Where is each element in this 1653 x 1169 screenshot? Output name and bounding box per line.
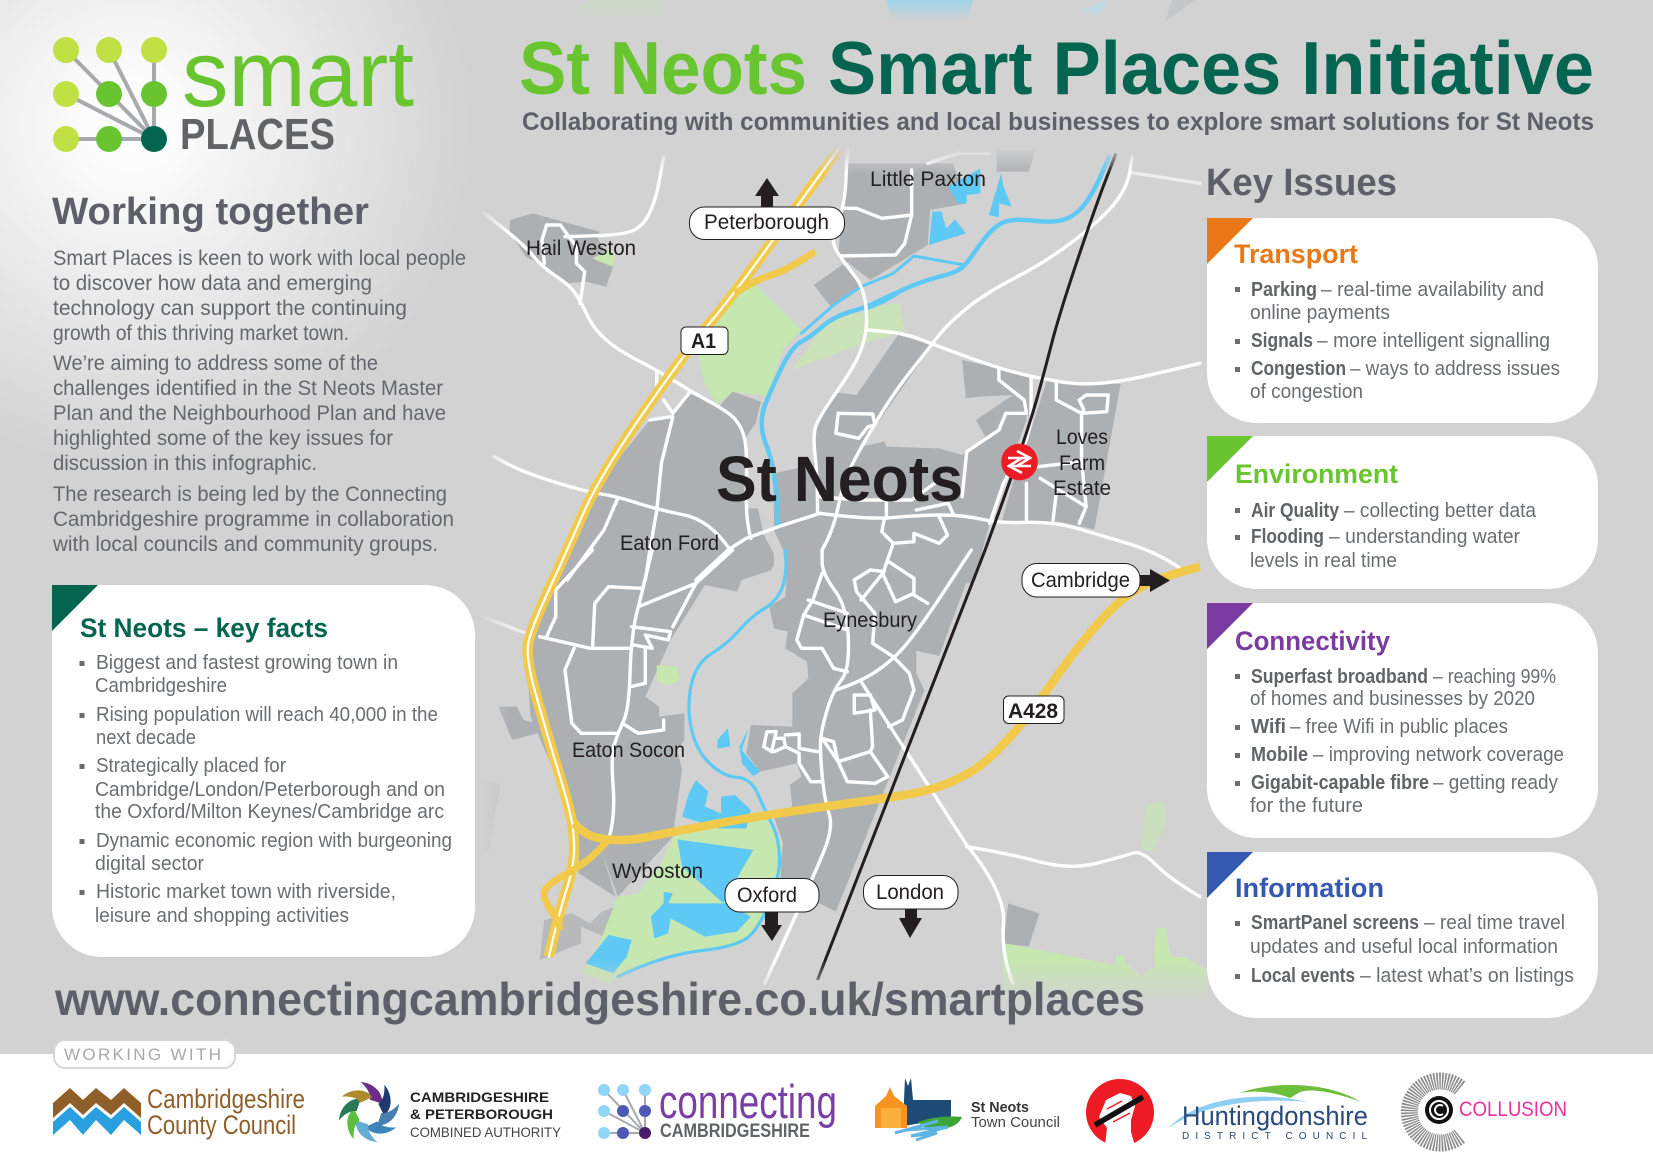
icon: railway station xyxy=(1001,444,1038,480)
transport heading: Transport xyxy=(1234,239,1358,269)
logo: Cambridgeshire and Peterborough Combined Authority xyxy=(336,1079,562,1145)
environment list: – understanding water xyxy=(1329,526,1520,548)
map labels: places: Loves xyxy=(1056,426,1108,449)
connectivity list: Gigabit-capable fibre xyxy=(1251,772,1429,794)
map: parks and green spaces xyxy=(581,250,1167,983)
map: lakes and River Great Ouse xyxy=(586,157,1109,977)
logo: Cambridgeshire County Council xyxy=(53,1084,305,1140)
connectivity list: – reaching 99% xyxy=(1433,666,1556,688)
road sign: London with arrow xyxy=(864,876,958,938)
transport list: – ways to address issues xyxy=(1350,358,1560,380)
text block: working together description: Smart Places is keen to work with local people xyxy=(53,247,466,270)
connectivity list: – free Wifi in public places xyxy=(1290,716,1508,738)
text block: working together description: challenges identified in the St Neots Master xyxy=(53,377,443,400)
key facts list: Dynamic economic region with burgeoning xyxy=(96,830,452,852)
logo: Cambridgeshire and Peterborough Combined Authority: CAMBRIDGESHIRE xyxy=(410,1089,549,1105)
text block: working together description: highlighted some of the key issues for xyxy=(53,427,393,450)
logo wordmark: smart xyxy=(182,21,414,126)
key facts list: Biggest and fastest growing town in xyxy=(96,652,398,674)
transport list: – more intelligent signalling xyxy=(1317,330,1550,352)
connectivity list: – improving network coverage xyxy=(1313,744,1564,766)
environment list: Air Quality xyxy=(1251,500,1340,522)
key facts list: Cambridge/London/Peterborough and on xyxy=(95,779,445,801)
text block: working together description xyxy=(52,247,466,556)
panel: Transport xyxy=(1207,218,1598,423)
website URL: www.connectingcambridgeshire.co.uk/smartplaces xyxy=(54,973,1145,1025)
footer band xyxy=(0,1054,1653,1169)
title: St Neots xyxy=(519,26,807,110)
road sign: London with arrow: London xyxy=(876,881,944,904)
map labels: places: Eaton Socon xyxy=(572,739,685,762)
logo icon: network dots xyxy=(53,37,167,152)
logo: St Neots Town Council: St Neots xyxy=(971,1099,1029,1116)
transport list: Parking xyxy=(1251,279,1317,301)
map of St Neots xyxy=(480,143,1207,1010)
smart places logo xyxy=(53,21,414,159)
information heading: Information xyxy=(1235,873,1384,903)
key facts list: the Oxford/Milton Keynes/Cambridge arc xyxy=(95,801,444,823)
logo: Connecting Cambridgeshire xyxy=(598,1075,837,1142)
key facts heading: St Neots – key facts xyxy=(80,613,328,643)
text block: working together description: Plan and the Neighbourhood Plan and have xyxy=(53,402,446,425)
map labels: places: Wyboston xyxy=(612,860,703,883)
connectivity list xyxy=(1235,666,1564,817)
logo: Huntingdonshire District Council: DISTRICT COUNCIL xyxy=(1182,1131,1367,1142)
logo: Collusion: COLLUSION xyxy=(1459,1098,1567,1121)
key facts list: Cambridgeshire xyxy=(95,675,227,697)
logo: St Neots Town Council xyxy=(875,1078,1060,1140)
logo: Cambridgeshire and Peterborough Combined Authority: COMBINED AUTHORITY xyxy=(410,1124,562,1140)
environment list: – collecting better data xyxy=(1344,500,1537,522)
connectivity list: – getting ready xyxy=(1433,772,1558,794)
text block: working together description: discussion in this infographic. xyxy=(53,452,317,475)
connectivity list: for the future xyxy=(1250,795,1363,817)
key facts list: Historic market town with riverside, xyxy=(96,881,396,903)
logo: Connecting Cambridgeshire: CAMBRIDGESHIRE xyxy=(660,1121,810,1142)
map: green space south-east xyxy=(1003,928,1207,1010)
map: railway line xyxy=(818,153,1116,980)
title xyxy=(519,26,1594,110)
map labels: places: Hail Weston xyxy=(526,237,636,260)
key facts list: leisure and shopping activities xyxy=(95,905,349,927)
map: A1 and A428 main roads xyxy=(528,143,1200,957)
information list: SmartPanel screens xyxy=(1251,912,1419,934)
map labels: places xyxy=(526,168,1111,883)
road sign: Cambridge with arrow xyxy=(1022,564,1170,597)
road sign: A428: A428 xyxy=(1008,700,1058,723)
transport list: – real-time availability and xyxy=(1321,279,1544,301)
logo: Connecting Cambridgeshire: connecting xyxy=(659,1075,837,1128)
map labels: places: Eynesbury xyxy=(823,609,917,632)
key facts list: Rising population will reach 40,000 in the xyxy=(96,704,438,726)
environment heading: Environment xyxy=(1235,459,1398,489)
subtitle: Collaborating with communities and local businesses to explore smart solutions for St Neots xyxy=(522,108,1594,136)
information list: – latest what’s on listings xyxy=(1360,965,1574,987)
connectivity list: Mobile xyxy=(1251,744,1308,766)
map label: town name: St Neots xyxy=(716,443,963,515)
panel: Information xyxy=(1207,852,1598,1018)
information list xyxy=(1235,912,1574,987)
transport list xyxy=(1235,279,1560,403)
heading: Key Issues: Key Issues xyxy=(1206,162,1397,204)
text block: working together description: to discover how data and emerging xyxy=(53,272,372,295)
transport list: Signals xyxy=(1251,330,1313,352)
road sign: A1: A1 xyxy=(691,330,716,353)
logo: Collusion xyxy=(1409,1081,1567,1143)
road sign: A1 xyxy=(681,327,728,354)
connectivity heading: Connectivity xyxy=(1235,626,1390,656)
map labels: places: Little Paxton xyxy=(870,168,986,191)
connectivity list: Wifi xyxy=(1251,716,1286,738)
text block: working together description: with local councils and community groups. xyxy=(52,533,438,556)
text block: working together description: growth of this thriving market town. xyxy=(53,322,349,345)
map labels: places: Eaton Ford xyxy=(620,532,719,555)
faint map remnants at top edge xyxy=(565,0,1195,22)
heading: Working together: Working together xyxy=(52,191,369,233)
logo wordmark: PLACES xyxy=(180,110,335,159)
label: Working with: WORKING WITH xyxy=(64,1045,221,1064)
map labels: places: Farm xyxy=(1059,452,1105,475)
road sign: Oxford with arrow xyxy=(725,878,819,941)
map labels: places: Estate xyxy=(1053,477,1111,500)
panel: Connectivity xyxy=(1207,603,1598,838)
transport list: online payments xyxy=(1250,302,1390,324)
key facts list: Strategically placed for xyxy=(96,755,286,777)
label: Working with xyxy=(54,1040,235,1068)
title: Smart Places Initiative xyxy=(828,26,1594,110)
road sign: A428 xyxy=(1004,696,1064,724)
information list: Local events xyxy=(1251,965,1355,987)
text block: working together description: The research is being led by the Connecting xyxy=(53,483,447,506)
environment list: levels in real time xyxy=(1250,550,1397,572)
logo: Huntingdonshire District Council xyxy=(1169,1085,1368,1142)
key facts list: next decade xyxy=(96,727,196,749)
information list: – real time travel xyxy=(1424,912,1565,934)
transport list: Congestion xyxy=(1251,358,1346,380)
text block: working together description: We’re aiming to address some of the xyxy=(53,352,378,375)
road sign: Cambridge with arrow: Cambridge xyxy=(1031,569,1130,592)
logo: Huntingdonshire District Council: Huntingdonshire xyxy=(1182,1101,1368,1131)
road sign: Peterborough with arrow xyxy=(690,178,844,240)
panel: Environment xyxy=(1207,436,1598,589)
key facts list: digital sector xyxy=(95,853,204,875)
logo: Cambridgeshire County Council: County Council xyxy=(147,1110,296,1140)
panel: St Neots key facts xyxy=(52,585,475,957)
map: built-up areas xyxy=(480,150,1121,960)
connectivity list: Superfast broadband xyxy=(1251,666,1428,688)
road sign: Oxford with arrow: Oxford xyxy=(737,884,797,907)
map: local roads xyxy=(482,150,1200,983)
text block: working together description: Cambridgeshire programme in collaboration xyxy=(53,508,454,531)
road sign: Peterborough with arrow: Peterborough xyxy=(704,211,829,234)
logo: St Neots Town Council: Town Council xyxy=(971,1114,1060,1131)
logo: Cambridgeshire and Peterborough Combined Authority: & PETERBOROUGH xyxy=(410,1106,553,1122)
connectivity list: of homes and businesses by 2020 xyxy=(1250,688,1535,710)
logo: red fist emblem xyxy=(1086,1079,1154,1146)
logo: Cambridgeshire County Council: Cambridgeshire xyxy=(147,1084,305,1114)
key facts list xyxy=(80,652,452,927)
environment list: Flooding xyxy=(1251,526,1324,548)
transport list: of congestion xyxy=(1250,381,1363,403)
text block: working together description: technology can support the continuing xyxy=(53,297,407,320)
information list: updates and useful local information xyxy=(1250,936,1558,958)
environment list xyxy=(1235,500,1537,572)
